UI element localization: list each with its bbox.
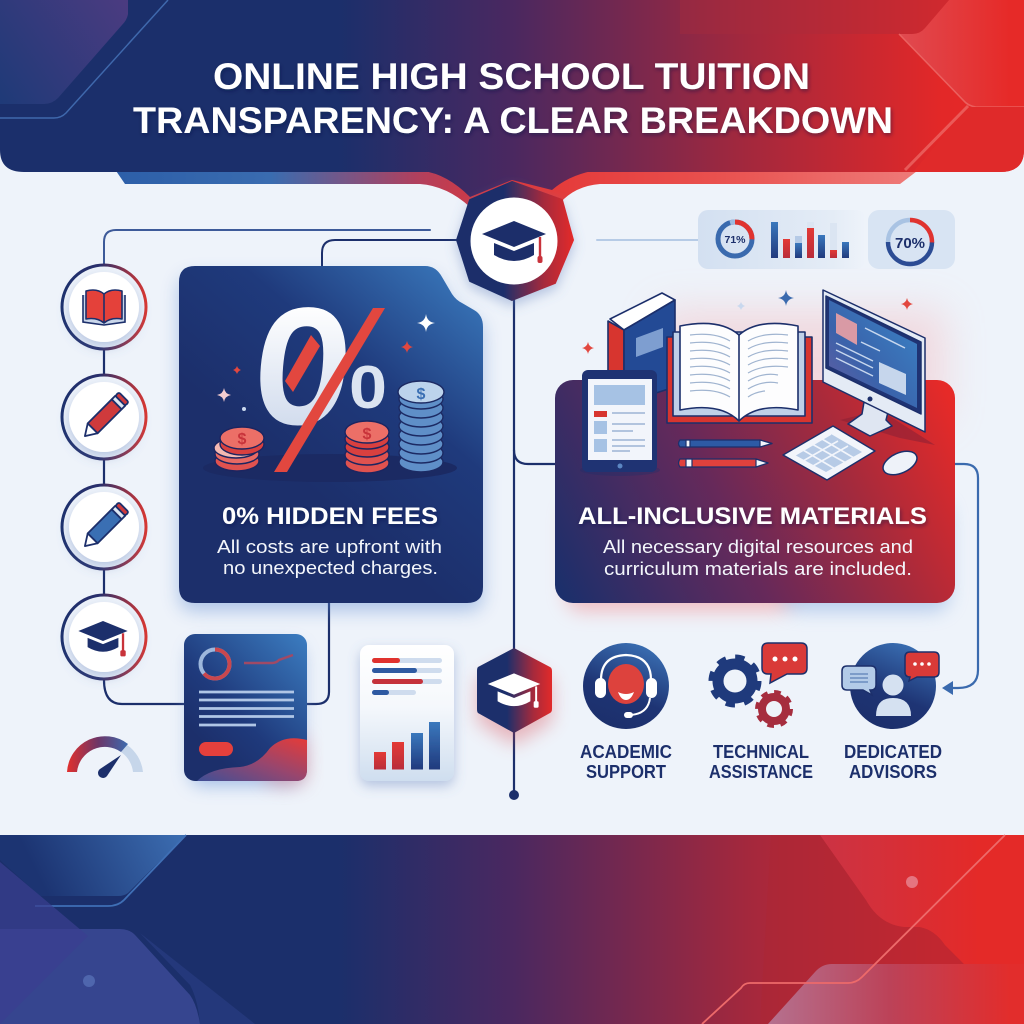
icon: graduation cap: [482, 221, 546, 263]
floor shadow: [203, 454, 457, 482]
title: TRANSPARENCY: A CLEAR BREAKDOWN: [133, 100, 893, 141]
line end dot: [509, 790, 519, 800]
chart panel two: [868, 210, 955, 269]
sparkles: [217, 314, 435, 411]
icon: keyboard: [783, 426, 875, 480]
icon: book badge: [62, 265, 146, 349]
donut 71%: [718, 222, 752, 256]
support labels: SUPPORT: [586, 762, 666, 782]
support labels: [580, 742, 942, 782]
person: [876, 674, 911, 716]
chart panel one: [698, 210, 866, 269]
document card: [184, 634, 307, 785]
support labels: ASSISTANCE: [709, 762, 813, 782]
panel: hidden fees: [179, 266, 483, 611]
icon: red pencil badge: [62, 375, 146, 459]
coins: blue stack: [398, 381, 444, 472]
icon: pencils: [678, 440, 772, 467]
wave: [197, 738, 307, 781]
gauge: [67, 736, 143, 778]
donut 70%: 70%: [895, 235, 925, 252]
big zero percent graphic: [251, 280, 387, 472]
navy gear: [711, 657, 759, 705]
button: [199, 742, 233, 756]
red gear: [757, 692, 791, 726]
header banner: [0, 0, 1024, 207]
text lines: [199, 692, 294, 725]
support labels: ADVISORS: [849, 762, 937, 782]
footer shapes left: [0, 835, 186, 896]
donut 70%: [888, 220, 932, 264]
heading: 0% HIDDEN FEES: [222, 503, 438, 530]
body text: [217, 537, 442, 578]
icon: academic support: [583, 643, 669, 729]
coins: blue stack: $: [417, 386, 426, 403]
arrow head: [942, 681, 953, 695]
connector lines: [104, 230, 978, 795]
icon: blue pencil badge: [62, 485, 146, 569]
big zero percent graphic: 0: [349, 354, 387, 421]
icon: blue book: [608, 293, 675, 403]
body text: no unexpected charges.: [223, 558, 438, 578]
sparkles: [582, 290, 913, 354]
trend line: [244, 655, 293, 663]
central hexagon badge: [457, 182, 573, 300]
body text: All costs are upfront with: [217, 537, 442, 557]
coins: middle red stack: [345, 421, 389, 473]
progress bars: [372, 658, 442, 695]
icon: graduation cap badge: [62, 595, 146, 679]
icon: desktop monitor: [823, 290, 935, 445]
panel: all-inclusive materials: [555, 290, 955, 612]
donut: [200, 650, 230, 678]
red bubble: [905, 652, 939, 681]
donut 71%: 71%: [724, 234, 746, 246]
chart card: [360, 645, 454, 781]
header accent band: [112, 165, 925, 207]
icon: open book: [667, 323, 812, 423]
icon: mouse: [879, 447, 921, 479]
bars: [374, 722, 440, 770]
header notch above badge: [423, 171, 592, 197]
left timeline icons: [62, 265, 146, 679]
top right chart strip: [698, 210, 955, 269]
support labels: TECHNICAL: [713, 742, 809, 762]
icon: graduation cap: [488, 673, 540, 708]
icon: dedicated advisors: [842, 643, 939, 729]
footer shapes right: [760, 835, 1024, 1024]
body text: curriculum materials are included.: [604, 559, 912, 579]
chat bubble: [762, 643, 807, 683]
support labels: ACADEMIC: [580, 742, 672, 762]
body text: All necessary digital resources and: [603, 537, 913, 557]
mini bar chart: [771, 222, 849, 258]
coins: middle red stack: $: [363, 426, 372, 443]
title: [133, 56, 893, 141]
title: ONLINE HIGH SCHOOL TUITION: [213, 56, 810, 97]
big zero percent graphic: 0: [251, 280, 355, 454]
support labels: DEDICATED: [844, 742, 942, 762]
small hexagon badge: [477, 648, 552, 745]
body text: [603, 537, 913, 579]
icon: technical assistance: [711, 643, 807, 726]
coins: left red stack: [214, 427, 264, 471]
footer banner: [0, 835, 1024, 1024]
coins: left red stack: $: [238, 431, 247, 448]
heading: ALL-INCLUSIVE MATERIALS: [578, 503, 927, 530]
icon: tablet: [580, 370, 660, 476]
blue bubble: [842, 666, 876, 695]
header shape top left: [0, 0, 128, 104]
header shape top right: [899, 0, 1024, 106]
pink glow: [650, 310, 945, 420]
